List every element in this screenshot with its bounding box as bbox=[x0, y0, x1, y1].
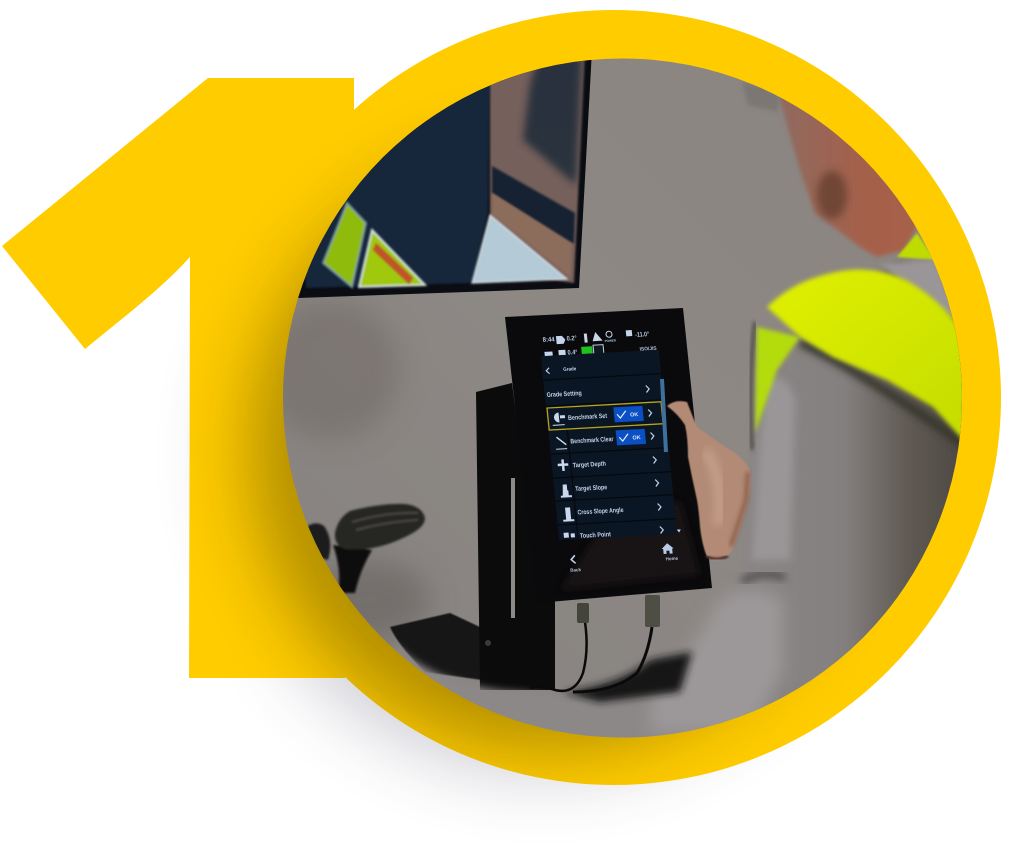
dark edge below vest bbox=[800, 342, 965, 445]
status bar: -11.0° bbox=[635, 330, 650, 339]
power label: POWER bbox=[604, 338, 617, 343]
pale triangular sign bbox=[472, 215, 567, 283]
menu text: Target Slope bbox=[575, 484, 608, 493]
OK badge 2 bbox=[616, 429, 646, 445]
knuckle highlight bbox=[705, 450, 720, 525]
red warning stripe bbox=[373, 243, 413, 284]
standard label: ISO/JIS bbox=[639, 346, 658, 353]
connector 1 bbox=[577, 603, 589, 623]
status bar: 0.2° bbox=[566, 334, 577, 343]
hand edge shade bbox=[731, 472, 748, 546]
grip ridges bbox=[352, 513, 418, 530]
tan lower strip bbox=[492, 193, 572, 278]
shoulder pale grey bbox=[882, 257, 954, 322]
row chevrons bbox=[546, 362, 664, 539]
OK badge 1 bbox=[613, 406, 644, 422]
person's grey shirt bbox=[395, 262, 980, 760]
numeral 1 bbox=[2, 78, 354, 678]
hi-vis vest strap bbox=[755, 327, 800, 433]
row labels: Grade Setting bbox=[546, 390, 582, 399]
wall monitor bbox=[280, 50, 592, 298]
menu text: Touch Point bbox=[580, 531, 612, 540]
soft shadow on white background bbox=[225, 135, 865, 775]
display reflection bbox=[560, 500, 700, 590]
pale vertical sleeve strip bbox=[752, 378, 795, 560]
menu text: Cross Slope Angle bbox=[577, 507, 624, 516]
home button: Home bbox=[665, 556, 679, 561]
front grip bbox=[335, 504, 425, 550]
menu text: Benchmark Clear bbox=[570, 436, 614, 445]
dark shape in terrain bbox=[523, 50, 582, 185]
status bar: 0.4° bbox=[567, 348, 578, 357]
menu text: Benchmark Set bbox=[568, 413, 608, 422]
glasses arm bbox=[742, 82, 780, 112]
home button bbox=[661, 543, 679, 562]
stem bbox=[333, 545, 372, 593]
shirt dark fold bbox=[742, 574, 785, 582]
vertical mount column bbox=[476, 383, 555, 690]
highlight frame on selected row bbox=[547, 402, 663, 430]
menu text: Target Depth bbox=[573, 461, 606, 469]
menu background bbox=[541, 350, 677, 542]
OK badge 1: OK bbox=[630, 412, 639, 419]
row separators bbox=[543, 374, 678, 548]
scroll down arrow bbox=[677, 529, 681, 533]
rear grip bbox=[305, 523, 330, 560]
operator's hand bbox=[667, 401, 751, 560]
circular photo of operator using touchscreen bbox=[283, 58, 962, 738]
green warning triangle sign bbox=[359, 230, 425, 287]
display body bbox=[505, 308, 712, 603]
pale shirt shoulder bbox=[650, 590, 783, 733]
status readouts: 8:44 bbox=[542, 336, 555, 344]
OK badge 2: OK bbox=[632, 435, 641, 442]
page status icon bbox=[593, 345, 604, 356]
dark machine beam bbox=[492, 166, 575, 243]
shadow under display bbox=[563, 652, 692, 702]
head bbox=[777, 90, 925, 257]
cable 2 bbox=[573, 627, 652, 692]
darker wall near upper left bbox=[283, 300, 400, 440]
hi-vis vest shoulder bbox=[767, 270, 965, 442]
scrollbar bbox=[662, 379, 666, 452]
breadcrumb: Grade bbox=[563, 366, 577, 373]
monitor terrain view bbox=[490, 50, 585, 283]
row icons bbox=[552, 412, 577, 538]
green status icon bbox=[581, 346, 593, 357]
column highlight bbox=[511, 478, 515, 618]
status bar bbox=[542, 329, 658, 359]
monitor frame bbox=[280, 50, 592, 298]
ear shadow bbox=[817, 171, 847, 219]
monitor dark blue panel bbox=[304, 85, 490, 288]
hi-vis collar bbox=[897, 233, 935, 260]
darker wall below joystick bbox=[310, 560, 430, 640]
menu list bbox=[541, 349, 684, 573]
green diamond sign bbox=[323, 203, 366, 287]
back button: Back bbox=[570, 567, 582, 573]
cable 1 bbox=[530, 622, 587, 691]
base plate bbox=[390, 613, 482, 680]
hand shape bbox=[667, 401, 751, 560]
menu text bbox=[544, 364, 627, 541]
vest strap shadow bbox=[751, 322, 755, 450]
back button bbox=[569, 555, 582, 573]
connector and cables bbox=[530, 595, 660, 692]
mount knob bbox=[485, 640, 491, 646]
shadow cast onto the yellow shapes bbox=[250, 150, 850, 750]
power ring icon bbox=[606, 331, 612, 337]
status icons bbox=[543, 330, 634, 358]
palm shade bbox=[706, 556, 728, 559]
wall background bbox=[270, 40, 980, 750]
yellow ring forming numeral 0 bbox=[226, 10, 1001, 785]
touchscreen display bbox=[505, 308, 712, 603]
joystick bbox=[305, 504, 425, 593]
display mounting arm bbox=[476, 383, 555, 690]
connector 2 bbox=[645, 595, 660, 627]
